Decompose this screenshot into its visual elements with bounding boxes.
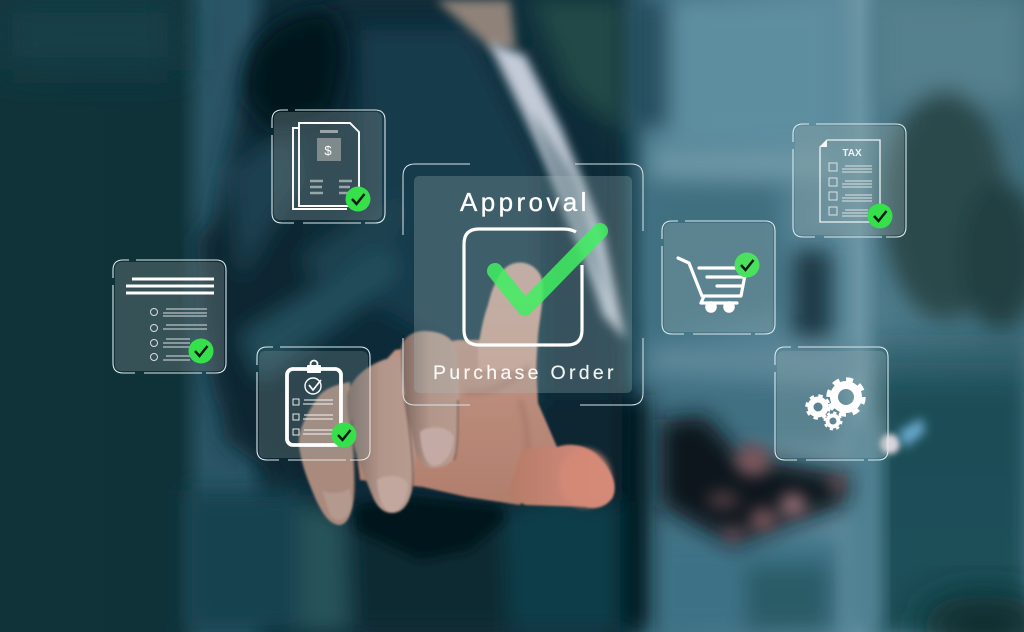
icon: approval check box <box>464 229 600 345</box>
panel: settings gears <box>775 347 888 460</box>
dark suit cuff behind hand <box>355 495 505 560</box>
panel: shopping cart <box>662 221 775 334</box>
icon: invoice pages: $ <box>324 143 332 158</box>
icon: tax form: TAX <box>842 148 862 159</box>
room and shelves <box>625 0 1024 632</box>
index finger <box>478 262 543 370</box>
finger gaps <box>352 395 458 497</box>
heading: Approval: Approval <box>460 187 590 217</box>
pointing hand <box>299 262 615 525</box>
panel: checklist document <box>113 260 226 373</box>
panel: invoice document <box>272 110 385 223</box>
heading: Purchase Order: Purchase Order <box>433 362 617 384</box>
neck <box>436 0 516 48</box>
white shirt <box>488 42 626 340</box>
icon: text list with checks <box>126 279 214 364</box>
phone hand <box>660 415 925 545</box>
panel: clipboard checklist <box>257 347 370 460</box>
panel: tax form <box>793 124 906 237</box>
icon: shopping cart <box>678 252 760 313</box>
panel: purchase order approval <box>403 164 643 405</box>
icon: gears <box>807 380 864 429</box>
little finger <box>299 382 354 525</box>
ring finger <box>347 356 415 513</box>
crease shading between index and palm <box>465 365 530 490</box>
black shoulder <box>245 10 343 130</box>
palm <box>350 340 557 505</box>
thumb <box>508 445 615 508</box>
middle finger <box>401 331 459 468</box>
lower right teal wall <box>878 320 1024 632</box>
icon: clipboard <box>287 360 356 448</box>
suit <box>185 0 648 632</box>
